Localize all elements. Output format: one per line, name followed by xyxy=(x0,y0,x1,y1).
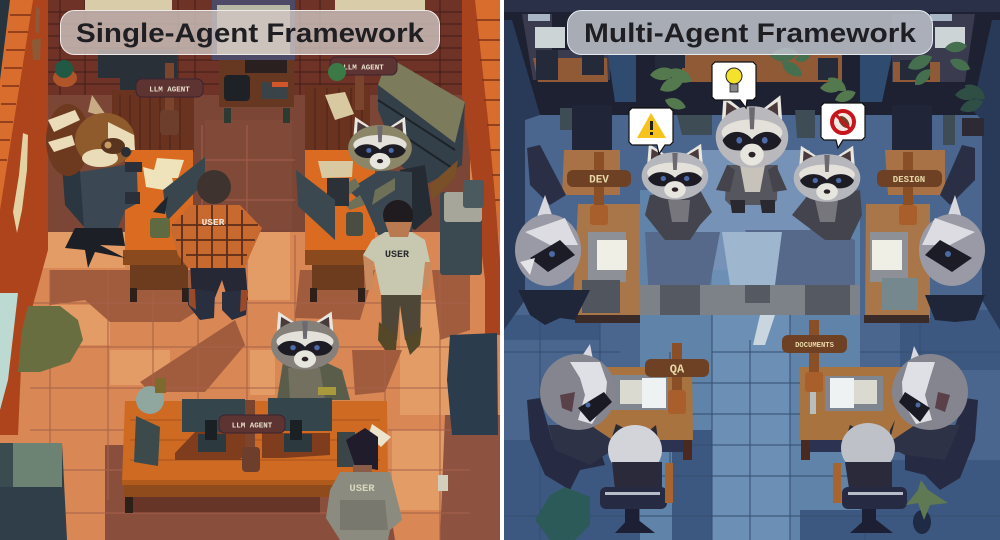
body xyxy=(792,190,862,240)
desk phone xyxy=(337,432,355,467)
sign: LLM AGENT left: LLM AGENT xyxy=(149,86,190,94)
sign: DEV: DEV xyxy=(589,174,609,186)
body xyxy=(548,425,620,465)
desk QA xyxy=(592,367,693,460)
raccoon center standing xyxy=(716,95,788,213)
raccoon floor shadows xyxy=(645,230,855,315)
body xyxy=(80,165,138,228)
upper left back desk xyxy=(562,105,620,195)
machine with mug xyxy=(440,180,484,275)
back table with gear xyxy=(219,60,294,123)
sign: LLM AGENT bottom xyxy=(219,400,285,472)
keyboard bottom xyxy=(134,416,160,466)
right wall panel xyxy=(462,0,500,335)
bubble: warning xyxy=(629,108,673,154)
chair upper right legs xyxy=(925,295,985,322)
head xyxy=(271,312,339,370)
shadow under bottom desk xyxy=(105,445,395,540)
chair xyxy=(395,165,432,230)
raccoon right standing xyxy=(792,146,862,240)
head xyxy=(348,117,412,171)
raccoon lower right back xyxy=(841,420,895,495)
upper right back desk xyxy=(885,105,945,195)
sign: LLM AGENT bottom: LLM AGENT xyxy=(232,422,273,430)
shelves xyxy=(533,55,940,82)
plant bottom right xyxy=(906,480,948,534)
chair upper left legs xyxy=(518,290,590,325)
desk globe xyxy=(136,378,166,414)
shelf items xyxy=(536,50,930,80)
legs xyxy=(190,262,248,300)
raccoon upper right seated xyxy=(919,195,985,286)
plant: back left xyxy=(650,63,695,113)
small floor note xyxy=(438,475,448,491)
chair back xyxy=(62,160,110,228)
plant: back right of center xyxy=(820,73,857,104)
sign: DESIGN xyxy=(877,152,942,225)
shoes xyxy=(188,288,248,320)
bottom desk xyxy=(122,401,388,513)
right window xyxy=(892,14,975,82)
chair lower right xyxy=(833,463,907,533)
plant bottom left xyxy=(535,487,590,540)
feet xyxy=(730,200,775,213)
shoes xyxy=(378,322,422,355)
panel divider xyxy=(500,0,504,540)
left wall panel xyxy=(0,0,48,435)
sign: DOCUMENTS: DOCUMENTS xyxy=(795,342,835,350)
left wall poster xyxy=(0,293,18,410)
title pill: single-agent xyxy=(60,10,440,54)
raccoon right: gray xyxy=(338,117,432,235)
head xyxy=(794,146,860,202)
title pill: single-agent: Single-Agent Framework xyxy=(76,18,425,48)
panel: single-agent office xyxy=(0,0,500,540)
upper right front desk xyxy=(864,204,930,323)
torso xyxy=(170,205,262,268)
chair base xyxy=(65,228,125,268)
raccoon lower left seated xyxy=(527,344,620,490)
shaded upper floor xyxy=(45,95,470,232)
body xyxy=(277,362,350,400)
raccoon lower right seated xyxy=(885,346,978,490)
sunlit floor patches xyxy=(30,232,450,510)
chair xyxy=(905,398,978,490)
right side wall xyxy=(972,20,1000,330)
dark floor corners xyxy=(504,310,1000,540)
sign: LLM AGENT right xyxy=(330,57,397,110)
left desk xyxy=(112,90,194,302)
wall plant xyxy=(53,60,77,87)
sign: QA xyxy=(645,343,709,414)
side chairs upper xyxy=(527,145,975,205)
body xyxy=(725,165,778,205)
wall pinned notes xyxy=(13,133,28,233)
bottom desk monitors xyxy=(182,398,332,452)
top dark wall xyxy=(504,0,1000,115)
sign: QA: QA xyxy=(670,362,685,376)
shadow right of panel xyxy=(440,415,500,540)
sign: DOCUMENTS xyxy=(782,320,847,392)
desk plant xyxy=(328,63,346,81)
green rug xyxy=(18,306,83,372)
legs xyxy=(381,290,421,340)
shirt label: USER xyxy=(202,217,225,228)
sign: DEV xyxy=(567,152,631,225)
user plaid shirt xyxy=(170,170,262,320)
floor xyxy=(0,0,500,540)
keyboard xyxy=(327,178,349,206)
head xyxy=(346,428,378,470)
ear xyxy=(578,344,595,370)
torso xyxy=(363,232,430,295)
head xyxy=(197,170,231,204)
whiteboard xyxy=(212,0,295,60)
chair xyxy=(527,398,605,490)
desk monitor shadows xyxy=(175,432,330,460)
papers right desk xyxy=(318,92,354,178)
papers left desk xyxy=(143,158,184,192)
right brick wall xyxy=(475,0,500,250)
raccoon front: seated agent xyxy=(271,312,350,400)
torso xyxy=(326,472,402,540)
sign: LLM AGENT left xyxy=(136,63,203,135)
desk documents xyxy=(800,367,920,460)
floor light streak xyxy=(753,315,775,345)
back brick wall xyxy=(45,0,465,95)
raccoon left: brown xyxy=(46,95,142,268)
posters on back wall xyxy=(85,0,425,11)
cast shadows on floor xyxy=(50,270,470,395)
left brick wall xyxy=(0,0,33,210)
floor pots xyxy=(560,108,955,145)
chair lower left xyxy=(600,463,673,533)
file cabinet xyxy=(378,57,465,200)
ceiling strip xyxy=(504,0,1000,12)
floor xyxy=(504,0,1000,540)
monitor left back xyxy=(153,196,168,214)
wall decoration xyxy=(32,6,41,60)
right desk xyxy=(305,85,375,302)
plant: right wall tall xyxy=(905,42,972,88)
paper xyxy=(368,424,391,447)
sign: LLM AGENT right: LLM AGENT xyxy=(343,64,384,72)
tile lines xyxy=(504,315,1000,540)
lighter center floor xyxy=(640,190,860,540)
head xyxy=(892,354,968,430)
head xyxy=(383,200,413,230)
floor cabinet xyxy=(0,443,67,540)
plant: right dark xyxy=(955,80,988,136)
left side wall xyxy=(504,20,540,330)
bubble: no bugs xyxy=(821,103,865,148)
floor light patch xyxy=(722,232,782,285)
lit aisle tiles xyxy=(205,120,292,230)
title pill: multi-agent xyxy=(568,10,932,54)
body xyxy=(645,190,712,240)
door pillars xyxy=(608,55,892,102)
monitor left xyxy=(163,157,205,221)
body xyxy=(885,425,960,460)
user white shirt xyxy=(363,200,432,355)
shirt label: USER xyxy=(349,483,375,495)
user gray shirt xyxy=(326,428,402,540)
head xyxy=(716,95,788,168)
title pill: multi-agent: Multi-Agent Framework xyxy=(584,18,917,48)
plant: back center xyxy=(770,48,811,81)
tail xyxy=(46,104,90,176)
wall screen xyxy=(98,50,177,95)
mug left xyxy=(150,218,170,238)
body xyxy=(348,170,412,235)
raccoon lower left back xyxy=(608,424,662,490)
raccoon left standing xyxy=(642,144,712,240)
head xyxy=(540,354,616,430)
stacked cases xyxy=(447,333,498,435)
monitor right xyxy=(296,170,335,240)
floor tile lines xyxy=(30,125,470,540)
raccoon upper left seated xyxy=(515,195,581,286)
left window xyxy=(522,14,610,80)
mug right xyxy=(346,212,363,236)
bubble: lightbulb xyxy=(712,62,756,108)
upper left front desk xyxy=(572,204,640,323)
arms xyxy=(363,255,432,290)
ear xyxy=(908,346,922,370)
gray floor band xyxy=(640,285,860,315)
sign: DESIGN: DESIGN xyxy=(893,175,925,185)
shirt label: USER xyxy=(385,250,409,261)
head xyxy=(88,95,108,118)
head xyxy=(642,144,708,200)
panel: multi-agent office xyxy=(504,0,1000,540)
